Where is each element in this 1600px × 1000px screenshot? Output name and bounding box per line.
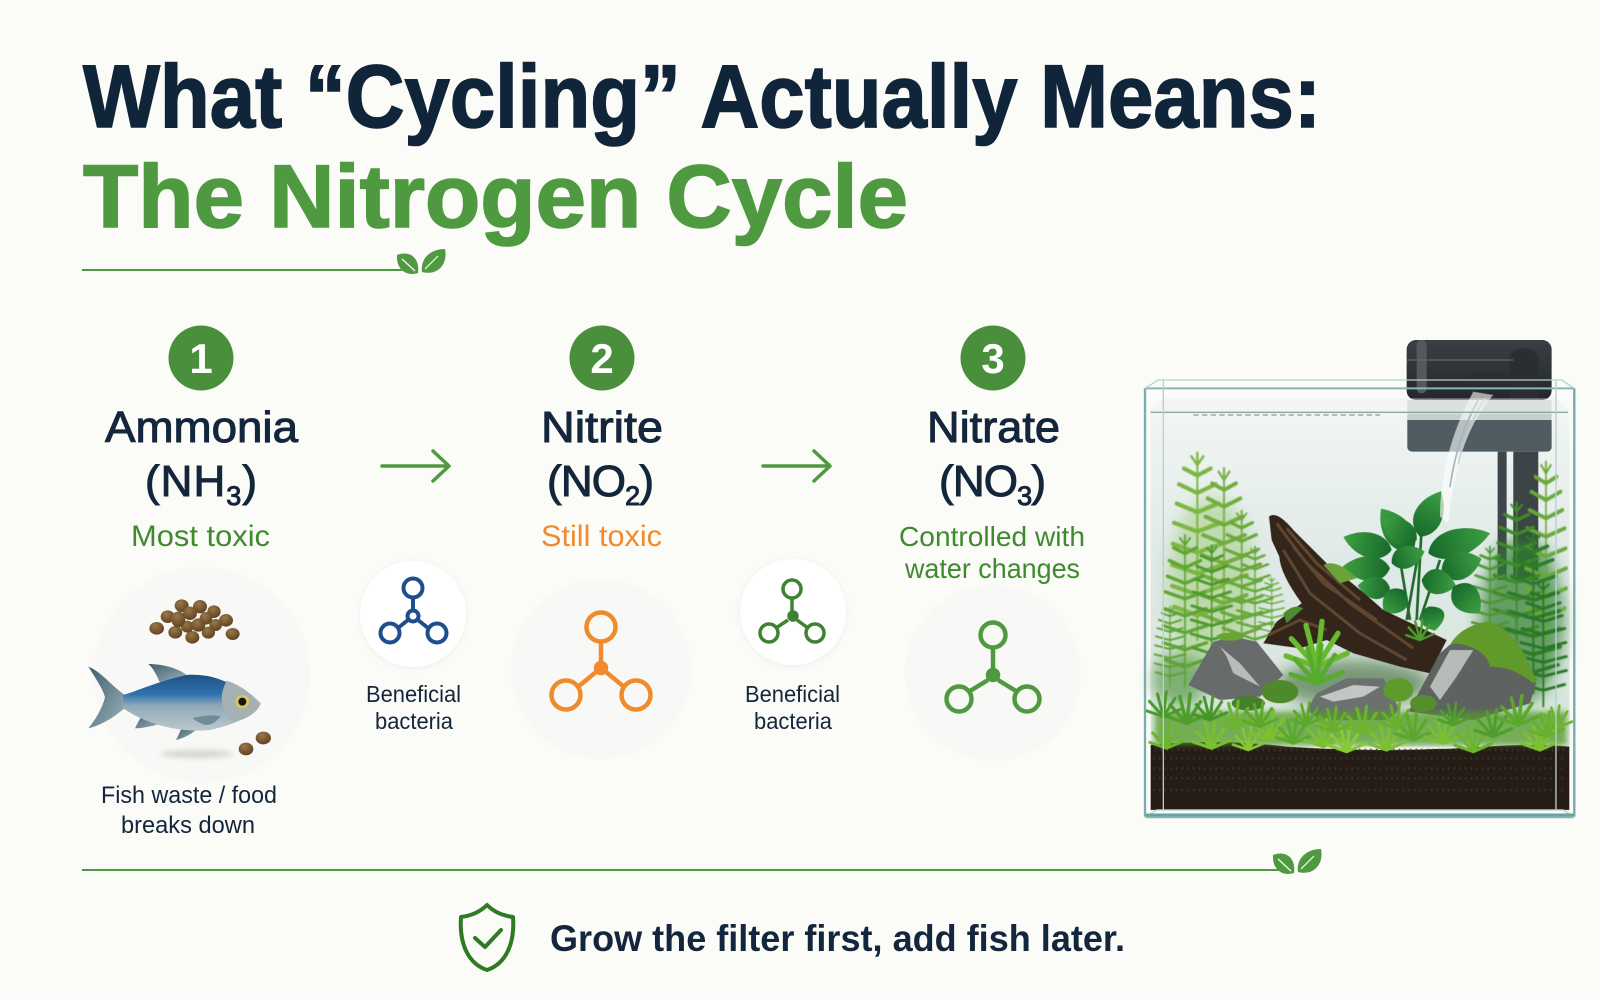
aquarium illustration <box>1145 340 1574 817</box>
bacteria 2 <box>740 559 846 734</box>
ammonia name: Ammonia <box>105 403 299 452</box>
takeaway <box>461 905 1125 970</box>
nitrate control label <box>899 521 1085 584</box>
nitrate control label: Controlled with <box>899 521 1085 552</box>
water surface <box>1150 398 1569 415</box>
number badge 1: 1 <box>189 335 213 382</box>
bacteria caption: bacteria <box>754 708 832 734</box>
step 2: nitrite <box>511 326 691 759</box>
ammonia toxicity label: Most toxic <box>131 520 270 553</box>
nitrate circle <box>905 585 1081 761</box>
broad leaf plant <box>1340 485 1494 634</box>
substrate <box>1151 742 1569 810</box>
title <box>83 46 1321 246</box>
food pellets <box>149 599 271 755</box>
back mid plants <box>1286 620 1434 683</box>
number badge 3 <box>960 326 1026 390</box>
ammonia formula: 3 <box>226 481 241 511</box>
nitrate formula: ) <box>1031 457 1046 506</box>
bacteria caption <box>366 681 461 734</box>
green molecule icon <box>946 622 1040 712</box>
arrow 1 <box>382 451 449 481</box>
moss clumps <box>1217 622 1537 712</box>
bacteria caption: Beneficial <box>366 681 461 707</box>
bottom divider with leaves <box>82 849 1322 874</box>
source caption: Fish waste / food <box>101 782 277 809</box>
title line one: What “Cycling” Actually Means: <box>83 46 1321 146</box>
ammonia formula: ) <box>242 457 257 506</box>
number badge 1 <box>168 326 234 390</box>
orange molecule icon <box>552 612 650 710</box>
nitrite formula: ) <box>639 457 654 506</box>
blue molecule icon <box>380 578 446 642</box>
bacteria 1 <box>360 561 466 734</box>
shield check icon <box>461 905 513 970</box>
title line two: The Nitrogen Cycle <box>83 146 908 246</box>
nitrate formula: (NO <box>939 457 1018 506</box>
carpet plants <box>1146 692 1572 752</box>
nitrite circle <box>511 579 691 759</box>
bacteria circle <box>360 561 466 667</box>
nitrate name: Nitrate <box>927 403 1060 452</box>
rocks <box>1188 630 1537 720</box>
arrow 2 <box>763 451 830 481</box>
source caption <box>101 782 277 839</box>
bacteria caption: Beneficial <box>745 681 840 707</box>
nitrate formula: 3 <box>1017 481 1032 511</box>
nitrite formula: 2 <box>625 481 640 511</box>
bacteria circle <box>740 559 846 665</box>
driftwood <box>1263 515 1447 673</box>
title underline with leaves <box>82 249 446 274</box>
number badge 2 <box>570 326 634 390</box>
water stream <box>1440 392 1493 523</box>
source circle <box>94 567 310 783</box>
ammonia formula: (NH <box>145 457 225 506</box>
hang-on filter <box>1407 340 1552 400</box>
water volume <box>1151 413 1569 747</box>
nitrite name: Nitrite <box>541 403 663 452</box>
green molecule icon <box>760 580 824 642</box>
nitrite formula: (NO <box>547 457 626 506</box>
step 3: nitrate <box>899 326 1085 761</box>
takeaway text: Grow the filter first, add fish later. <box>550 918 1125 959</box>
glass tank frame <box>1145 380 1574 817</box>
nitrite toxicity label: Still toxic <box>541 520 662 553</box>
bacteria caption <box>745 681 840 734</box>
bacteria caption: bacteria <box>375 708 453 734</box>
plant colour haze <box>1153 497 1563 707</box>
step 1: ammonia <box>88 326 310 839</box>
stem plants right <box>1472 462 1566 707</box>
fish <box>88 664 261 758</box>
stem plants left <box>1155 453 1284 687</box>
number badge 3: 3 <box>981 335 1005 382</box>
number badge 2: 2 <box>590 335 614 382</box>
nitrate control label: water changes <box>904 553 1080 584</box>
filter below water <box>1407 400 1552 580</box>
source caption: breaks down <box>121 812 255 839</box>
